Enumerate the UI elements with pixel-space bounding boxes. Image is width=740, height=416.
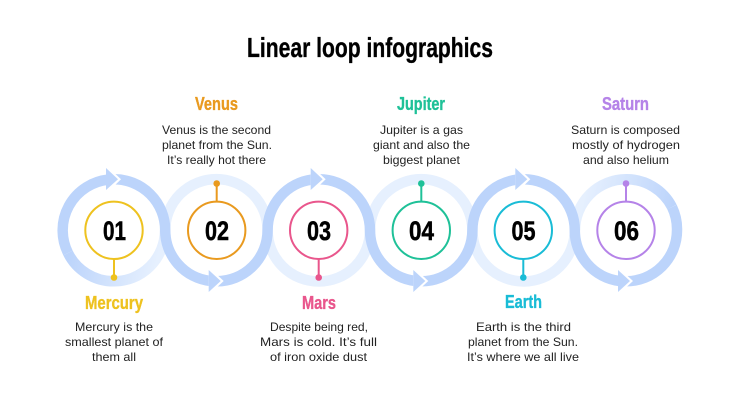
S-curve segments xyxy=(63,179,677,281)
light ring segments xyxy=(165,179,575,282)
text: Earth xyxy=(467,292,579,364)
text: Saturn: Saturn is composed xyxy=(571,123,680,137)
circle 06: 06 xyxy=(614,216,639,246)
circle 01: 01 xyxy=(103,216,126,246)
title: Linear loop infographics xyxy=(247,32,493,63)
arrowheads xyxy=(106,168,630,292)
text: Venus: planet from the Sun. xyxy=(162,138,272,152)
text: Mercury: them all xyxy=(92,350,136,364)
circle 04: 04 xyxy=(409,216,434,246)
text: Mars: Mars xyxy=(302,293,336,313)
text: Mars: Mars is cold. It’s full xyxy=(260,335,377,349)
text: Saturn: Saturn xyxy=(602,94,649,114)
circle 04 xyxy=(393,180,450,259)
circle 06 xyxy=(597,180,655,259)
circle 02 xyxy=(188,180,245,259)
text: Jupiter xyxy=(373,94,470,167)
text: Mercury xyxy=(65,293,164,364)
text: Venus xyxy=(162,94,272,167)
text: Mercury: smallest planet of xyxy=(65,335,164,349)
text: Jupiter: biggest planet xyxy=(383,153,461,167)
circle 05 xyxy=(495,202,552,281)
text: Earth: planet from the Sun. xyxy=(468,335,578,349)
text: Jupiter: giant and also the xyxy=(373,138,470,152)
text: Saturn xyxy=(571,94,680,167)
text: Mercury: Mercury xyxy=(85,293,143,313)
circle 03: 03 xyxy=(307,216,331,246)
text: Venus: It’s really hot there xyxy=(167,153,266,167)
text: Mercury: Mercury is the xyxy=(75,320,153,334)
text: Jupiter: Jupiter xyxy=(397,94,445,114)
text: Saturn: and also helium xyxy=(583,153,669,167)
text: Earth: Earth is the third xyxy=(476,320,571,334)
faded end arc xyxy=(575,179,672,230)
text: Saturn: mostly of hydrogen xyxy=(572,138,680,152)
text: Earth: Earth xyxy=(505,292,542,312)
text: Jupiter: Jupiter is a gas xyxy=(380,123,463,137)
arrowhead notches xyxy=(106,165,633,295)
faded start arc xyxy=(68,230,165,281)
circle 05: 05 xyxy=(512,216,536,246)
text: Venus: Venus xyxy=(195,94,238,114)
circle 02: 02 xyxy=(205,216,229,246)
circle 03 xyxy=(290,202,347,281)
circle 01 xyxy=(85,202,143,281)
text: Mars: Despite being red, xyxy=(270,320,368,334)
loop ribbon xyxy=(63,179,677,282)
text: Earth: It’s where we all live xyxy=(467,350,579,364)
text: Mars xyxy=(260,293,377,364)
text: Mars: of iron oxide dust xyxy=(270,350,368,364)
text: Venus: Venus is the second xyxy=(162,123,271,137)
